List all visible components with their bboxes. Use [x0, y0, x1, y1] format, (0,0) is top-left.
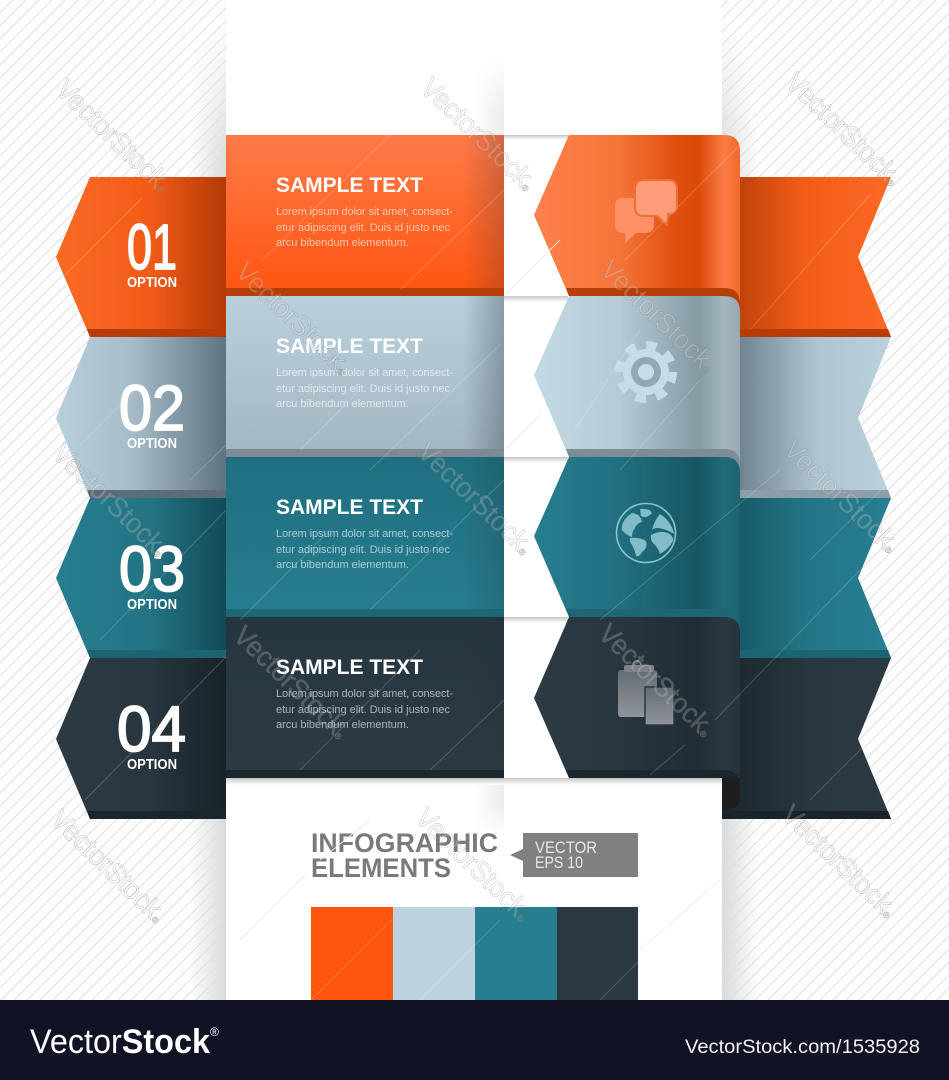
watermarks: VectorStock® [415, 72, 543, 197]
tag: vector eps 10 [510, 833, 638, 877]
icon: clipboards [618, 661, 674, 725]
watermarks: VectorStock® [45, 804, 173, 929]
panel: row 3: Lorem ipsum dolor sit amet, consect- [276, 528, 453, 540]
watermarks [45, 67, 908, 929]
icon: globe [616, 504, 676, 562]
tail 1 [722, 177, 891, 337]
watermarks: VectorStock® [410, 802, 538, 927]
tab 3 globe [534, 457, 740, 641]
tab 4 clipboards [534, 617, 740, 800]
panel: row 3: arcu bibendum elementum. [276, 559, 409, 571]
panel: row 3 [226, 457, 504, 617]
panel: row 1: Lorem ipsum dolor sit amet, consect- [276, 206, 453, 218]
panel: row 4: SAMPLE TEXT [276, 655, 423, 679]
panel: row 4: arcu bibendum elementum. [276, 719, 409, 731]
watermarks: VectorStock® [50, 74, 178, 199]
right ribbon tails [722, 177, 891, 819]
arrow 02: 02 [119, 372, 185, 444]
panel: row 2: Lorem ipsum dolor sit amet, consect- [276, 367, 453, 379]
diagonal net lines [65, 135, 891, 1000]
tail 3 [722, 498, 891, 658]
arrow 02: OPTION [127, 436, 177, 452]
heading [311, 828, 498, 883]
arrow 02 [56, 337, 226, 498]
panel: row 4: Lorem ipsum dolor sit amet, consect- [276, 688, 453, 700]
colour swatches [311, 907, 638, 1000]
footer logo: VectorStock [30, 1023, 210, 1061]
panel: row 1: SAMPLE TEXT [276, 173, 423, 197]
panel: row 3: etur adipiscing elit. Duis id justo nec [276, 544, 450, 556]
arrow 04 [56, 658, 226, 819]
panel: row 2: SAMPLE TEXT [276, 334, 423, 358]
right hexagon tabs with icons [534, 135, 740, 800]
heading: ELEMENTS [311, 853, 451, 883]
icon: gear [619, 345, 673, 399]
heading: INFOGRAPHIC [311, 828, 498, 858]
watermarks: VectorStock® [412, 436, 540, 561]
arrow 01: OPTION [127, 275, 177, 291]
footer url: VectorStock.com/1535928 [685, 1037, 920, 1058]
left number arrows [56, 177, 226, 819]
bottom white card [226, 778, 740, 1000]
tail 4 [722, 658, 891, 819]
watermarks: VectorStock® [230, 256, 358, 381]
watermarks: VectorStock® [228, 620, 356, 745]
footer registered mark: ® [210, 1025, 219, 1039]
watermarks: VectorStock® [47, 438, 175, 563]
tab 1 chat [534, 135, 740, 320]
tag: vector eps 10: VECTOR [535, 838, 597, 857]
footer bar [0, 1000, 949, 1080]
watermarks: VectorStock® [778, 434, 906, 559]
panel: row 2: arcu bibendum elementum. [276, 398, 409, 410]
arrow 01 [56, 177, 226, 337]
panel: row 2 [226, 296, 504, 457]
watermarks: VectorStock® [776, 799, 904, 924]
panel: row 3: SAMPLE TEXT [276, 495, 423, 519]
watermarks: VectorStock® [593, 618, 721, 743]
tab 2 gear [534, 296, 740, 481]
panel: row 4 [226, 617, 504, 778]
arrow 04: OPTION [127, 757, 177, 773]
gap shadows [504, 135, 568, 623]
white center sheet [226, 0, 722, 1000]
center text panels [226, 135, 504, 778]
watermarks: VectorStock® [780, 67, 908, 192]
watermarks: VectorStock® [595, 254, 723, 379]
panel: row 1: etur adipiscing elit. Duis id justo nec [276, 222, 450, 234]
arrow 04: 04 [117, 693, 186, 765]
arrow 03: OPTION [127, 597, 177, 613]
icon: chat bubbles [615, 180, 677, 243]
arrow 01: 01 [127, 211, 177, 283]
panel: row 4: etur adipiscing elit. Duis id justo nec [276, 704, 450, 716]
arrow 03 [56, 498, 226, 658]
tail 2 [722, 337, 891, 498]
panel: row 1 [226, 135, 504, 296]
tag: vector eps 10: EPS 10 [535, 853, 583, 872]
panel: row 2: etur adipiscing elit. Duis id justo nec [276, 383, 450, 395]
arrow 03: 03 [119, 533, 185, 605]
panel: row 1: arcu bibendum elementum. [276, 237, 409, 249]
